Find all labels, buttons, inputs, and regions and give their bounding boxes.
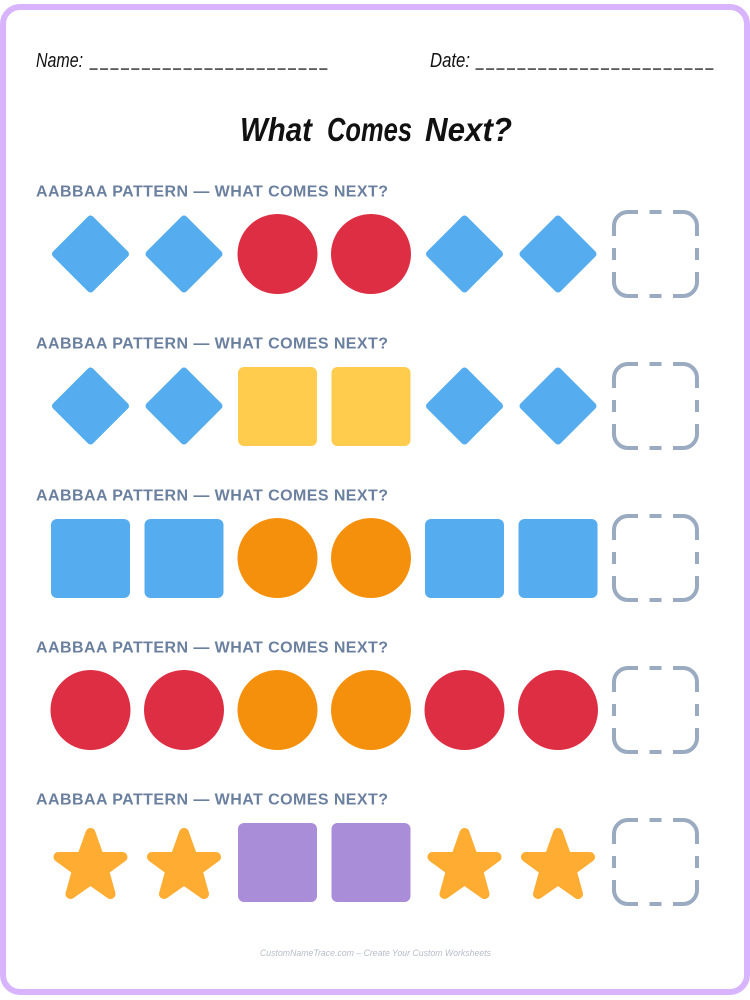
row 2 label: AABBAA PATTERN — WHAT COMES NEXT? <box>36 336 388 352</box>
row 5 label: AABBAA PATTERN — WHAT COMES NEXT? <box>36 792 388 808</box>
row 3 shapes <box>51 518 598 598</box>
row 2 answer box <box>614 364 697 448</box>
row 1 shapes <box>56 214 593 294</box>
date field: _______________________ <box>475 55 714 70</box>
title: Comes <box>327 111 412 148</box>
name field <box>36 50 328 72</box>
row 3 label: AABBAA PATTERN — WHAT COMES NEXT? <box>36 488 388 504</box>
row 3 answer box <box>614 516 697 600</box>
row 1 answer box <box>614 212 697 296</box>
row 1 label: AABBAA PATTERN — WHAT COMES NEXT? <box>36 184 388 200</box>
name field: Name: <box>36 50 83 72</box>
name field: _______________________ <box>89 55 328 70</box>
row 2 shapes <box>56 367 593 446</box>
row 4 shapes <box>50 670 598 750</box>
row 2 <box>36 336 697 448</box>
row 4 label: AABBAA PATTERN — WHAT COMES NEXT? <box>36 640 388 656</box>
row 5 <box>36 792 697 904</box>
date field <box>430 50 714 72</box>
row 1 <box>36 184 697 296</box>
footer: CustomNameTrace.com – Create Your Custom Worksheets <box>260 948 491 959</box>
title <box>240 111 512 148</box>
date field: Date: <box>430 50 470 72</box>
row 3 <box>36 488 697 600</box>
row 5 answer box <box>614 820 697 904</box>
row 4 answer box <box>614 668 697 752</box>
title: Next? <box>425 111 512 148</box>
row 5 shapes <box>58 823 590 902</box>
title: What <box>240 111 314 148</box>
row 4 <box>36 640 697 752</box>
